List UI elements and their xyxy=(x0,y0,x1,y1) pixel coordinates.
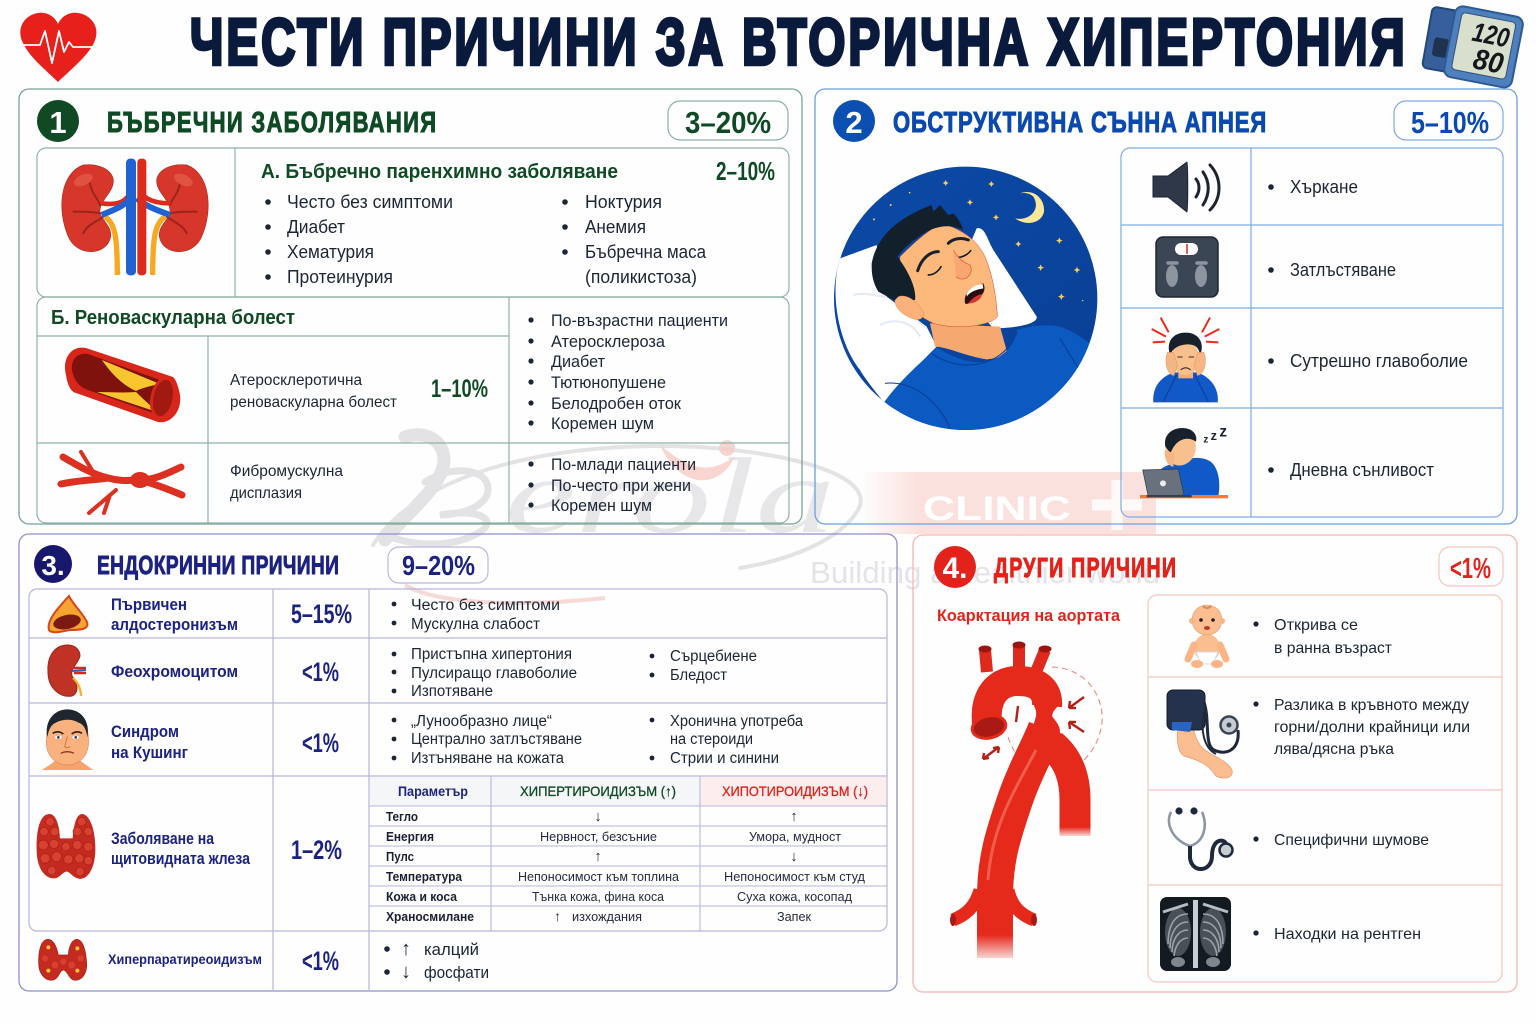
list: atherosclerotic features: Атеросклероза xyxy=(551,333,666,351)
symptom list left: Хематурия xyxy=(287,242,374,262)
label: fibromuscular dysplasia xyxy=(230,463,343,502)
list: pheochromocytoma: Пристъпна хипертония xyxy=(411,646,572,663)
icon: adrenal gland xyxy=(49,596,87,632)
icon: blood pressure monitor: 80 xyxy=(1470,44,1506,81)
table: hyperthyroidism vs hypothyroidism: Кожа и коса xyxy=(386,889,458,904)
table: hyperthyroidism vs hypothyroidism: изхождания xyxy=(572,909,642,924)
names of conditions: алдостеронизъм xyxy=(111,616,238,634)
list: Cushing syndrome: Стрии и синини xyxy=(670,750,779,767)
names of conditions: Заболяване на xyxy=(111,830,215,848)
list: Cushing syndrome: на стероиди xyxy=(670,731,753,748)
list: hyperparathyroidism: ↑ xyxy=(401,938,411,960)
table: other cause signs xyxy=(1148,595,1502,982)
icon: baby xyxy=(1188,605,1226,668)
icon: blood pressure monitor xyxy=(1422,5,1524,89)
percentage badge: 3–20%: 3–20% xyxy=(685,105,771,140)
percentage badge: <1% xyxy=(1439,547,1503,586)
icon: body scale xyxy=(1156,237,1218,297)
table: hyperthyroidism vs hypothyroidism: Тънка кожа, фина коса xyxy=(532,889,665,904)
label: fibromuscular dysplasia: Фибромускулна xyxy=(230,463,343,480)
percentages of endocrine causes: <1% xyxy=(302,657,339,687)
icon: thyroid gland xyxy=(37,814,95,879)
list: Cushing syndrome: „Лунообразно лице“ xyxy=(411,713,552,730)
icon: heart with ECG line xyxy=(20,13,97,82)
list: X-ray findings: Находки на рентген xyxy=(1274,926,1421,943)
icon: man with morning headache xyxy=(1152,318,1219,402)
symptom list left: Диабет xyxy=(287,217,345,237)
list: primary aldosteronism: Мускулна слабост xyxy=(411,616,540,633)
number badge 4: 4. xyxy=(942,552,968,585)
list: atherosclerotic features: Белодробен оток xyxy=(551,395,682,413)
list: blood pressure difference: Разлика в кръвното между xyxy=(1274,697,1469,714)
list: early age detection: в ранна възраст xyxy=(1274,640,1393,657)
names of conditions: Първичен xyxy=(111,596,187,614)
number badge 3: 3. xyxy=(41,550,65,581)
table: hyperthyroidism vs hypothyroidism: ↓ xyxy=(790,848,798,865)
names of conditions: Феохромоцитом xyxy=(111,663,238,681)
percentage badge: <1%: <1% xyxy=(1450,553,1491,585)
list: morning headache: Сутрешно главоболие xyxy=(1290,351,1468,371)
list: hyperparathyroidism: фосфати xyxy=(424,963,489,982)
list: fibromuscular features: По-често при жени xyxy=(551,477,691,495)
list: pheochromocytoma: Изпотяване xyxy=(411,683,493,700)
icon: sleepy man at laptop: z xyxy=(1211,429,1217,443)
table: sleep apnea symptoms xyxy=(1121,148,1503,517)
list: atherosclerotic features: Диабет xyxy=(551,353,605,371)
percentages of endocrine causes: <1% xyxy=(302,946,339,976)
percentages of endocrine causes: 1–2% xyxy=(291,835,342,865)
percentage: 1–10%: 1–10% xyxy=(431,375,488,403)
list: pheochromocytoma: Бледост xyxy=(670,667,727,684)
table: hyperthyroidism vs hypothyroidism: ↑ xyxy=(594,848,602,865)
number badge 2 xyxy=(833,100,875,142)
list: blood pressure difference: лява/дясна ръка xyxy=(1274,741,1394,758)
icon: parathyroid glands xyxy=(39,939,87,980)
list: Cushing syndrome: Хронична употреба xyxy=(670,713,803,730)
heading: sleep apnea: ОБСТРУКТИВНА СЪННА АПНЕЯ xyxy=(893,107,1266,139)
list: snoring: Хъркане xyxy=(1290,177,1358,197)
list: blood pressure difference: горни/долни крайници или xyxy=(1274,719,1470,736)
list: pheochromocytoma xyxy=(392,646,757,700)
list: Cushing syndrome: Централно затлъстяване xyxy=(411,731,582,748)
heading: B renovascular disease: Б. Реноваскуларна болест xyxy=(51,307,295,329)
list: pheochromocytoma: Пулсиращо главоболие xyxy=(411,665,577,682)
list: hyperparathyroidism: калций xyxy=(424,940,479,959)
table: hyperthyroidism vs hypothyroidism: Нервност, безсъние xyxy=(540,829,657,844)
heading: kidney diseases: БЪБРЕЧНИ ЗАБОЛЯВАНИЯ xyxy=(107,107,436,139)
label: atherosclerotic: Атеросклеротична xyxy=(230,372,362,389)
icon: branching renal artery xyxy=(61,452,182,513)
table: hyperthyroidism vs hypothyroidism: Параметър xyxy=(398,784,468,799)
percentage badge: 9–20%: 9–20% xyxy=(402,550,475,581)
heading: endocrine causes: ЕНДОКРИННИ ПРИЧИНИ xyxy=(97,550,339,580)
table: hyperthyroidism vs hypothyroidism: ХИПЕРТИРОИДИЗЪМ (↑) xyxy=(520,783,676,799)
number badge 1 xyxy=(37,100,79,142)
list: blood pressure difference xyxy=(1253,697,1470,758)
icon: kidneys xyxy=(62,159,208,275)
list: fibromuscular features: По-млади пациенти xyxy=(551,456,696,474)
list: fibromuscular features xyxy=(528,456,696,515)
icon: blood pressure cuff on arm xyxy=(1167,690,1238,778)
names of conditions: на Кушинг xyxy=(111,744,188,762)
icon: speaker snoring xyxy=(1153,162,1219,212)
table: hyperthyroidism vs hypothyroidism: Запек xyxy=(777,909,811,924)
names of conditions xyxy=(108,596,262,967)
percentages of endocrine causes xyxy=(291,599,352,976)
percentage: 2–10%: 2–10% xyxy=(716,156,775,186)
list: obesity: Затлъстяване xyxy=(1290,260,1396,280)
panel: endocrine causes xyxy=(19,534,897,991)
symptom list left xyxy=(265,192,453,287)
number badge 4 xyxy=(934,546,976,588)
table: hyperthyroidism vs hypothyroidism: ↑ xyxy=(790,808,798,825)
percentage badge: 5–10%: 5–10% xyxy=(1411,105,1489,140)
list: primary aldosteronism: Често без симптоми xyxy=(411,597,560,614)
list: atherosclerotic features: По-възрастни пациенти xyxy=(551,312,728,330)
list: pheochromocytoma: Сърцебиене xyxy=(670,648,757,665)
panel: obstructive sleep apnea xyxy=(815,89,1517,524)
label: atherosclerotic xyxy=(230,372,398,411)
icon: sleepy man at laptop: z xyxy=(1203,435,1208,446)
list: early age detection xyxy=(1253,617,1393,657)
names of conditions: щитовидната жлеза xyxy=(111,850,251,868)
title: ЧЕСТИ ПРИЧИНИ ЗА ВТОРИЧНА ХИПЕРТОНИЯ xyxy=(190,6,1405,79)
list: primary aldosteronism xyxy=(392,597,560,633)
table: hyperthyroidism vs hypothyroidism: Умора, мудност xyxy=(749,829,841,844)
heading: A parenchymal disease: А. Бъбречно паренхимно заболяване xyxy=(261,160,618,183)
label: atherosclerotic: реноваскуларна болест xyxy=(230,394,398,411)
symptom list right: (поликистоза) xyxy=(585,267,697,287)
label: fibromuscular dysplasia: дисплазия xyxy=(230,485,302,502)
watermark: clinic logo: Building a healthier world xyxy=(810,555,1160,590)
list: Cushing syndrome xyxy=(392,713,803,767)
table: endocrine rows xyxy=(29,589,887,991)
table: hyperthyroidism vs hypothyroidism: Енергия xyxy=(386,829,434,844)
icon: sleepy man at laptop: z xyxy=(1219,424,1227,441)
list: daytime sleepiness: Дневна сънливост xyxy=(1290,460,1434,480)
illustration: aorta with coarctation xyxy=(950,642,1102,958)
symptom list right: Ноктурия xyxy=(585,192,662,212)
watermark: clinic logo: CLINIC xyxy=(923,490,1071,528)
table: hyperthyroidism vs hypothyroidism xyxy=(369,776,887,931)
table: hyperthyroidism vs hypothyroidism: Тегло xyxy=(386,809,418,824)
heading: other causes: ДРУГИ ПРИЧИНИ xyxy=(994,553,1176,584)
icon: Cushing moon face xyxy=(42,709,93,770)
table: hyperthyroidism vs hypothyroidism: Температура xyxy=(386,869,463,884)
number badge 2: 2 xyxy=(845,105,863,140)
panel: kidney diseases xyxy=(19,89,802,524)
symptom list right: Бъбречна маса xyxy=(585,242,707,262)
table: hyperthyroidism vs hypothyroidism: Непоносимост към студ xyxy=(724,869,865,884)
symptom list left: Често без симптоми xyxy=(287,192,453,212)
names of conditions: Синдром xyxy=(111,723,179,741)
watermark: clinic logo: erola xyxy=(505,437,835,556)
list: hyperparathyroidism xyxy=(384,938,489,983)
panel: other causes xyxy=(913,535,1517,992)
table: hyperthyroidism vs hypothyroidism: Пулс xyxy=(386,849,414,864)
list: Cushing syndrome: Изтъняване на кожата xyxy=(411,750,564,767)
list: specific murmurs: Специфични шумове xyxy=(1274,832,1429,849)
percentages of endocrine causes: <1% xyxy=(302,728,339,758)
symptom list right: Анемия xyxy=(585,217,646,237)
table: hyperthyroidism vs hypothyroidism: Храносмилане xyxy=(386,909,474,924)
table: renovascular disease xyxy=(37,297,789,523)
table: hyperthyroidism vs hypothyroidism: ХИПОТИРОИДИЗЪМ (↓) xyxy=(722,783,868,799)
icon: stethoscope xyxy=(1169,807,1232,869)
icon: chest X-ray xyxy=(1160,897,1231,971)
names of conditions: Хиперпаратиреоидизъм xyxy=(108,951,262,967)
list: fibromuscular features: Коремен шум xyxy=(551,497,652,515)
illustration: sleeping man snoring xyxy=(834,167,1097,443)
watermark: clinic logo xyxy=(373,435,1160,603)
table: hyperthyroidism vs hypothyroidism: Суха кожа, косопад xyxy=(737,889,852,904)
symptom list left: Протеинурия xyxy=(287,267,393,287)
icon: blood pressure monitor: 120 xyxy=(1470,17,1512,53)
percentages of endocrine causes: 5–15% xyxy=(291,599,352,629)
number badge 3 xyxy=(34,545,72,583)
icon: artery with plaque xyxy=(65,348,180,422)
icon: kidney xyxy=(48,645,86,696)
list: atherosclerotic features: Коремен шум xyxy=(551,415,654,433)
list: atherosclerotic features: Тютюнопушене xyxy=(551,374,666,392)
table: hyperthyroidism vs hypothyroidism: Непоносимост към топлина xyxy=(518,869,680,884)
number badge 1: 1 xyxy=(49,105,67,140)
table: hyperthyroidism vs hypothyroidism: ↓ xyxy=(594,808,602,825)
table: parenchymal disease xyxy=(37,148,789,297)
list: atherosclerotic features xyxy=(528,312,728,433)
table: hyperthyroidism vs hypothyroidism: ↑ xyxy=(554,908,561,924)
heading: coarctation of the aorta: Коарктация на аортата xyxy=(937,606,1121,625)
symptom list right xyxy=(562,192,707,287)
list: early age detection: Открива се xyxy=(1274,617,1358,634)
icon: sleepy man at laptop xyxy=(1140,424,1228,498)
list: hyperparathyroidism: ↓ xyxy=(401,961,411,983)
